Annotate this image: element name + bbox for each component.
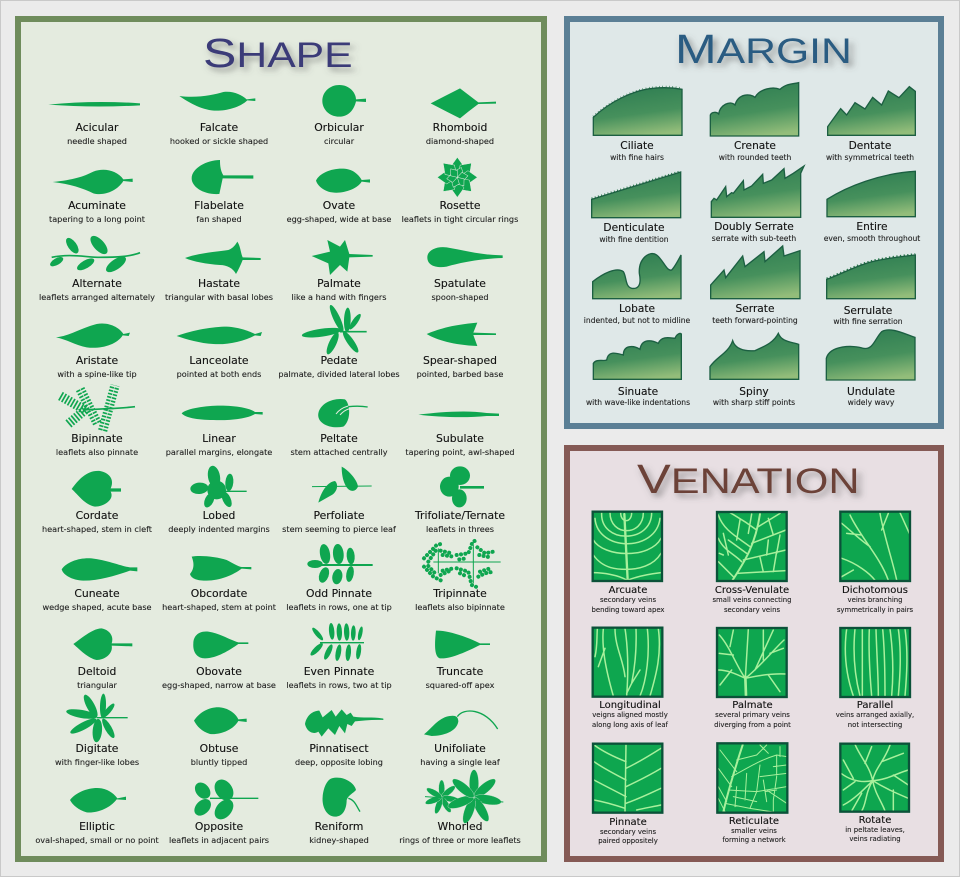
- leaf: lanceolate: [177, 327, 262, 379]
- venation: arcuate: [591, 512, 665, 614]
- margin: serrulate: Serrulate: [844, 305, 892, 317]
- leaf: obcordate: [162, 556, 276, 612]
- leaf: unifoliate: having a single leaf: [420, 757, 501, 767]
- leaf: falcate: Falcate: [200, 121, 238, 134]
- margin: crenate: [710, 83, 799, 162]
- leaf: obovate: [162, 632, 276, 690]
- margin: serrulate: [827, 254, 915, 326]
- venation: cross-venulate: Cross-Venulate: [715, 585, 789, 596]
- venation: arcuate: secondary veins: [600, 596, 656, 604]
- venation: dichotomous: veins branching: [848, 596, 902, 604]
- venation: parallel: Parallel: [857, 700, 893, 711]
- leaf: whorled: [399, 770, 521, 845]
- leaf: aristate: [56, 324, 137, 379]
- leaf: spatulate: [427, 247, 503, 302]
- leaf: spear-shaped: pointed, barbed base: [417, 369, 503, 379]
- leaf: bipinnate: leaflets also pinnate: [56, 447, 138, 457]
- margin: serrate: teeth forward-pointing: [712, 316, 798, 325]
- leaf: obcordate: Obcordate: [191, 587, 248, 600]
- leaf: peltate: [290, 399, 388, 457]
- leaf: digitate: Digitate: [76, 742, 119, 755]
- leaf: opposite: [169, 776, 269, 845]
- leaf: perfoliate: Perfoliate: [313, 509, 365, 522]
- panel: shape: [18, 19, 544, 859]
- leaf: elliptic: Elliptic: [79, 820, 115, 833]
- leaf: cuneate: Cuneate: [74, 587, 120, 600]
- leaf: unifoliate: [420, 711, 501, 767]
- leaf: orbicular: [314, 85, 366, 146]
- leaf: palmate: like a hand with fingers: [292, 292, 386, 302]
- leaf: reniform: kidney-shaped: [309, 835, 369, 845]
- leaf: rosette: leaflets in tight circular rings: [402, 214, 518, 224]
- leaf: trifoliate: leaflets in threes: [426, 524, 494, 534]
- margin: ciliate: [593, 87, 682, 162]
- leaf: linear: [166, 406, 272, 457]
- venation: parallel: [836, 628, 914, 729]
- margin: sinuate: [586, 334, 690, 407]
- margin: sinuate: Sinuate: [618, 386, 658, 398]
- leaf: subulate: [405, 412, 515, 457]
- venation: rotate: Rotate: [859, 815, 891, 826]
- margin: doubly serrate: serrate with sub-teeth: [712, 234, 796, 243]
- margin: doubly serrate: [711, 166, 804, 243]
- leaf: unifoliate: Unifoliate: [434, 742, 486, 755]
- leaf: obovate: egg-shaped, narrow at base: [162, 680, 276, 690]
- leaf: spatulate: spoon-shaped: [431, 292, 489, 302]
- leaf: pedate: [278, 304, 400, 379]
- margin: doubly serrate: Doubly Serrate: [714, 221, 794, 233]
- heading: margin: MARGIN: [675, 26, 852, 72]
- venation: longitudinal: veigns aligned mostly: [592, 711, 668, 719]
- leaf: acuminate: [49, 170, 145, 224]
- venation: parallel: veins arranged axially,: [836, 711, 914, 719]
- leaf: spear-shaped: [417, 323, 503, 379]
- leaf: rosette: Rosette: [440, 199, 481, 212]
- leaf: obtuse: [191, 707, 247, 767]
- venation: longitudinal: along long axis of leaf: [592, 721, 669, 729]
- leaf: subulate: tapering point, awl-shaped: [405, 447, 515, 457]
- leaf: lobed: Lobed: [203, 509, 235, 522]
- leaf: rhomboid: [426, 88, 496, 146]
- leaf: aristate: with a spine-like tip: [57, 369, 137, 379]
- leaf: even pinnate: Even Pinnate: [304, 665, 375, 678]
- leaf: peltate: Peltate: [320, 432, 358, 445]
- venation: reticulate: smaller veins: [731, 827, 777, 835]
- margin: undulate: [826, 330, 915, 407]
- leaf: perfoliate: stem seeming to pierce leaf: [282, 524, 397, 534]
- margin: denticulate: with fine dentition: [599, 235, 669, 244]
- leaf: cordate: heart-shaped, stem in cleft: [42, 524, 152, 534]
- leaf: odd pinnate: [286, 543, 392, 612]
- margin: ciliate: Ciliate: [620, 140, 654, 152]
- leaf: orbicular: circular: [324, 136, 355, 146]
- margin: crenate: with rounded teeth: [719, 153, 791, 162]
- leaf: reniform: [309, 778, 369, 845]
- leaf: reniform: Reniform: [315, 820, 363, 833]
- margin: entire: Entire: [856, 221, 888, 233]
- venation: palmate: several primary veins: [715, 711, 790, 719]
- heading: shape: SHAPE: [203, 30, 353, 76]
- leaf: acicular: Acicular: [76, 121, 119, 134]
- venation: pinnate: secondary veins: [600, 828, 656, 836]
- leaf: rhomboid: diamond-shaped: [426, 136, 494, 146]
- leaf: falcate: hooked or sickle shaped: [170, 136, 268, 146]
- leaf: peltate: stem attached centrally: [290, 447, 388, 457]
- leaf: obtuse: bluntly tipped: [191, 757, 247, 767]
- venation: reticulate: [717, 743, 787, 844]
- venation: dichotomous: symmetrically in pairs: [837, 606, 914, 614]
- venation: palmate: Palmate: [732, 700, 773, 711]
- leaf: odd pinnate: leaflets in rows, one at tip: [286, 602, 392, 612]
- leaf: cuneate: wedge shaped, acute base: [42, 602, 152, 612]
- leaf: spatulate: Spatulate: [434, 277, 486, 290]
- margin: lobate: [584, 254, 691, 325]
- heading: venation: VENATION: [637, 456, 860, 502]
- venation: longitudinal: Longitudinal: [599, 700, 661, 711]
- leaf: hastate: Hastate: [198, 277, 240, 290]
- margin: sinuate: with wave-like indentations: [586, 398, 690, 407]
- leaf: flabelate: Flabelate: [194, 199, 244, 212]
- margin: crenate: Crenate: [734, 140, 776, 152]
- leaf: perfoliate: [282, 467, 397, 534]
- leaf: pinnatisect: [295, 709, 383, 767]
- leaf: orbicular: Orbicular: [314, 121, 364, 134]
- margin: entire: [824, 171, 920, 243]
- leaf: cuneate: [42, 558, 152, 612]
- leaf: acicular: needle shaped: [67, 136, 127, 146]
- venation: cross-venulate: secondary veins: [724, 606, 780, 614]
- margin: undulate: Undulate: [847, 386, 895, 398]
- leaf: acuminate: tapering to a long point: [49, 214, 145, 224]
- leaf: ovate: egg-shaped, wide at base: [287, 214, 391, 224]
- leaf: palmate: Palmate: [317, 277, 361, 290]
- leaf: obcordate: heart-shaped, stem at point: [162, 602, 276, 612]
- leaf: whorled: Whorled: [437, 820, 483, 833]
- leaf: alternate: [39, 233, 155, 302]
- margin: dentate: Dentate: [849, 140, 891, 152]
- leaf: lobed: [168, 465, 270, 534]
- leaf: truncate: [426, 631, 495, 690]
- leaf: palmate: [292, 240, 386, 302]
- leaf: tripinnate: leaflets also bipinnate: [415, 602, 505, 612]
- leaf: truncate: squared-off apex: [426, 680, 495, 690]
- leaf: opposite: Opposite: [195, 820, 244, 833]
- venation: reticulate: Reticulate: [729, 816, 779, 827]
- leaf: acuminate: Acuminate: [68, 199, 126, 212]
- venation: rotate: veins radiating: [849, 835, 901, 843]
- margin: spiny: [710, 333, 799, 407]
- leaf: opposite: leaflets in adjacent pairs: [169, 835, 269, 845]
- leaf: deltoid: [73, 628, 132, 690]
- margin: dentate: with symmetrical teeth: [826, 153, 914, 162]
- venation: palmate: [714, 628, 791, 729]
- venation: arcuate: Arcuate: [609, 585, 647, 596]
- leaf: lanceolate: pointed at both ends: [177, 369, 261, 379]
- leaf: elliptic: [35, 788, 159, 845]
- panel: margin: [567, 19, 941, 426]
- panel: venation: [567, 448, 941, 859]
- venation: dichotomous: [837, 512, 914, 614]
- leaf: digitate: with finger-like lobes: [55, 757, 139, 767]
- leaf: alternate: Alternate: [72, 277, 122, 290]
- venation: pinnate: Pinnate: [609, 817, 647, 828]
- leaf: obtuse: Obtuse: [200, 742, 239, 755]
- leaf: bipinnate: [56, 385, 138, 457]
- leaf: tripinnate: [415, 540, 505, 612]
- leaf: digitate: [55, 693, 139, 767]
- leaf: lobed: deeply indented margins: [168, 524, 270, 534]
- leaf: hastate: [165, 242, 273, 302]
- leaf: trifoliate: [414, 466, 505, 534]
- leaf: ovate: Ovate: [323, 199, 356, 212]
- leaf: trifoliate: Trifoliate/Ternate: [414, 509, 505, 522]
- leaf: whorled: rings of three or more leaflets: [399, 835, 521, 845]
- leaf: even pinnate: [286, 623, 392, 690]
- leaf: pinnatisect: Pinnatisect: [309, 742, 369, 755]
- leaf: pinnatisect: deep, opposite lobing: [295, 757, 383, 767]
- leaf: cordate: [42, 471, 152, 534]
- margin: serrate: [711, 246, 800, 325]
- margin: denticulate: Denticulate: [603, 222, 665, 234]
- margin: ciliate: with fine hairs: [610, 153, 664, 162]
- venation: pinnate: paired oppositely: [598, 837, 658, 845]
- leaf: acicular: [48, 102, 140, 146]
- leaf: aristate: Aristate: [76, 354, 118, 367]
- margin: serrate: Serrate: [736, 303, 774, 315]
- venation: reticulate: forming a network: [722, 836, 786, 844]
- venation: cross-venulate: [712, 512, 792, 614]
- leaf: deltoid: Deltoid: [78, 665, 116, 678]
- margin: denticulate: [592, 171, 681, 244]
- leaf: falcate: [170, 92, 268, 146]
- leaf: ovate: [287, 169, 391, 224]
- leaf: linear: parallel margins, elongate: [166, 447, 272, 457]
- margin: lobate: Lobate: [619, 303, 655, 315]
- venation: arcuate: bending toward apex: [591, 606, 665, 614]
- venation: rotate: [840, 744, 909, 843]
- leaf: rosette: [402, 157, 518, 224]
- leaf: lanceolate: Lanceolate: [189, 354, 249, 367]
- venation: parallel: not intersecting: [848, 721, 902, 729]
- leaf: pedate: palmate, divided lateral lobes: [278, 369, 400, 379]
- leaf: elliptic: oval-shaped, small or no point: [35, 835, 159, 845]
- margin: undulate: widely wavy: [848, 398, 895, 407]
- leaf: even pinnate: leaflets in rows, two at tip: [286, 680, 392, 690]
- leaf: spear-shaped: Spear-shaped: [423, 354, 497, 367]
- margin: spiny: with sharp stiff points: [713, 398, 795, 407]
- venation: rotate: in peltate leaves,: [845, 826, 905, 834]
- leaf: tripinnate: Tripinnate: [432, 587, 487, 600]
- venation: pinnate: [593, 744, 662, 845]
- leaf: pedate: Pedate: [320, 354, 358, 367]
- leaf: obovate: Obovate: [196, 665, 242, 678]
- margin: lobate: indented, but not to midline: [584, 316, 691, 325]
- leaf: flabelate: fan shaped: [196, 214, 242, 224]
- leaf: deltoid: triangular: [77, 680, 118, 690]
- margin: entire: even, smooth throughout: [824, 234, 920, 243]
- venation: palmate: diverging from a point: [714, 721, 791, 729]
- margin: spiny: Spiny: [739, 386, 769, 398]
- leaf: rhomboid: Rhomboid: [433, 121, 487, 134]
- leaf: alternate: leaflets arranged alternately: [39, 292, 155, 302]
- leaf: linear: Linear: [202, 432, 236, 445]
- margin: serrulate: with fine serration: [833, 317, 903, 326]
- leaf: cordate: Cordate: [76, 509, 119, 522]
- venation: cross-venulate: small veins connecting: [712, 596, 792, 604]
- leaf: flabelate: [192, 160, 253, 224]
- leaf: subulate: Subulate: [436, 432, 484, 445]
- leaf: hastate: triangular with basal lobes: [165, 292, 273, 302]
- venation: dichotomous: Dichotomous: [842, 585, 908, 596]
- venation: longitudinal: [592, 628, 669, 729]
- margin: dentate: [826, 87, 915, 162]
- leaf: bipinnate: Bipinnate: [71, 432, 123, 445]
- leaf: truncate: Truncate: [436, 665, 484, 678]
- leaf: odd pinnate: Odd Pinnate: [306, 587, 372, 600]
